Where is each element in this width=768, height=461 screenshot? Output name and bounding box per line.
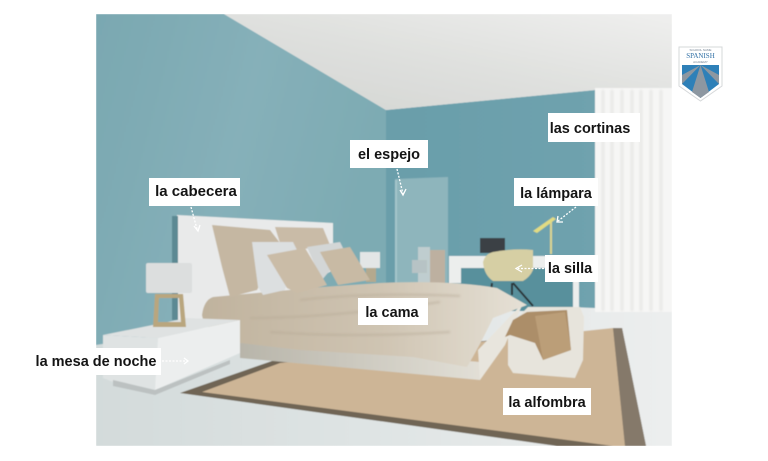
ceiling <box>224 14 672 110</box>
mirror <box>395 177 448 283</box>
desk lamp <box>533 217 556 254</box>
ottoman with blanket <box>505 307 584 378</box>
rug <box>180 328 646 446</box>
label: el espejo <box>350 140 428 168</box>
label: las cortinas: las cortinas <box>550 121 630 137</box>
panel: bedroom photo <box>96 14 672 446</box>
logo: Spanish Academy shield: SCHOOL NAME <box>689 48 712 52</box>
far bedside lamp <box>360 252 380 282</box>
arrow: la silla <box>516 265 544 272</box>
bed duvet <box>202 282 527 367</box>
arrow: la lámpara <box>557 207 576 222</box>
arrow: el espejo <box>397 169 406 195</box>
headboard <box>177 215 333 325</box>
bed base <box>240 342 480 380</box>
chair <box>483 249 533 306</box>
logo: Spanish Academy shield: SPANISH <box>686 52 715 60</box>
label: la cama <box>358 298 428 325</box>
label: la lámpara <box>514 178 598 206</box>
logo: Spanish Academy shield <box>679 47 722 101</box>
night table lamp <box>146 263 192 327</box>
arrow: la mesa de noche <box>162 358 188 364</box>
label: la alfombra <box>503 388 591 415</box>
label: el espejo: el espejo <box>358 147 420 163</box>
label: la mesa de noche <box>28 348 161 375</box>
curtains <box>595 88 672 312</box>
label: las cortinas <box>548 113 640 142</box>
back wall <box>386 90 595 315</box>
nightstand <box>103 318 240 395</box>
label: la cabecera <box>149 178 240 206</box>
label: la lámpara: la lámpara <box>520 186 593 202</box>
label: la cama: la cama <box>365 305 420 321</box>
desk <box>449 238 579 311</box>
label: la cabecera: la cabecera <box>155 183 238 200</box>
left wall <box>96 14 386 350</box>
logo: Spanish Academy shield: ACADEMY <box>693 60 708 64</box>
label: la silla <box>545 255 598 282</box>
pillows <box>212 225 370 297</box>
arrow: la cabecera <box>191 207 200 231</box>
floor <box>96 300 672 446</box>
label: la alfombra: la alfombra <box>508 395 587 411</box>
label: la silla: la silla <box>548 261 593 277</box>
label: la mesa de noche: la mesa de noche <box>36 354 156 370</box>
